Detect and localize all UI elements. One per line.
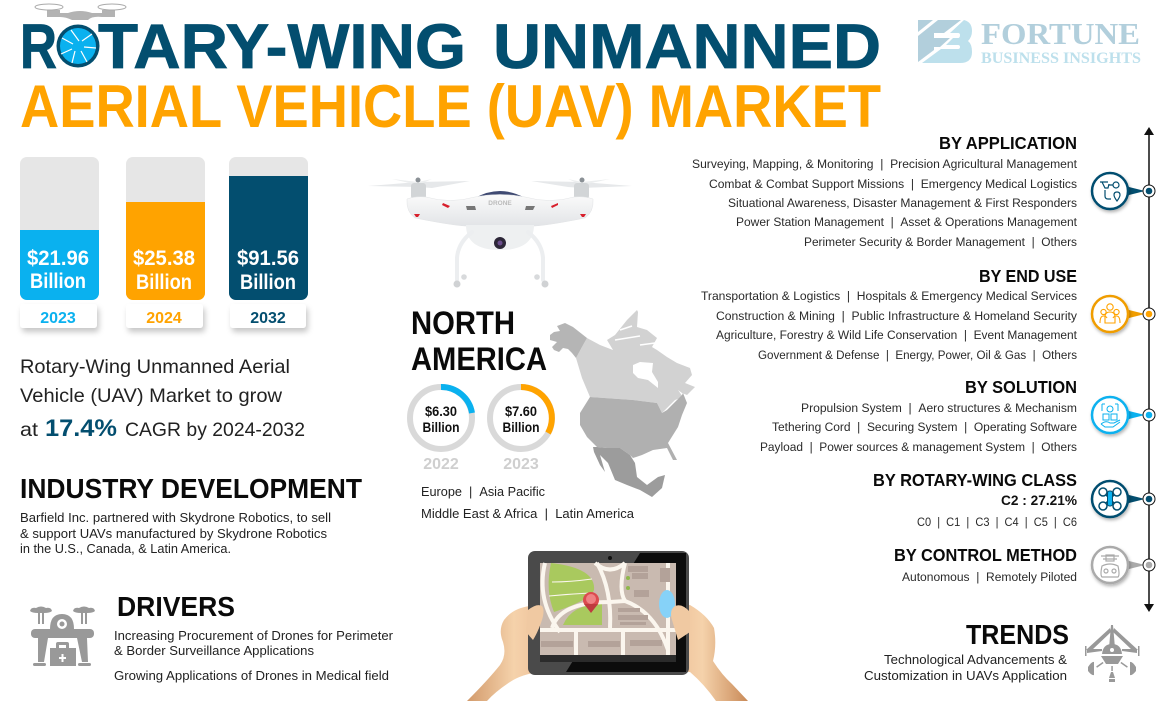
section: by application: Situational Awareness, Disaster Management & First Responders xyxy=(728,196,1077,210)
icon: lens in title xyxy=(56,24,100,68)
map: Canada xyxy=(576,310,695,413)
left arm xyxy=(467,606,545,701)
bar 2023 xyxy=(20,157,99,328)
text block: other regions: Europe | Asia Pacific xyxy=(421,484,545,499)
section: by solution: Propulsion System | Aero structures & Mechanism xyxy=(801,401,1077,415)
section: by solution: Payload | Power sources & management System | Others xyxy=(760,440,1077,454)
bar 2032: $91.56 xyxy=(237,247,299,270)
logo word FORTUNE: FORTUNE xyxy=(981,16,1140,51)
section: by control method: BY CONTROL METHOD xyxy=(894,545,1077,565)
map: Mexico xyxy=(593,447,665,497)
text block: CAGR statement: Vehicle (UAV) Market to grow xyxy=(20,385,283,407)
text block: drivers: Growing Applications of Drones in Medical field xyxy=(114,668,389,683)
text block: CAGR statement: Rotary-Wing Unmanned Aerial xyxy=(20,356,290,378)
text block: trends: Technological Advancements & xyxy=(884,652,1067,667)
section: by solution: BY SOLUTION xyxy=(965,377,1077,397)
heading: drivers: DRIVERS xyxy=(117,591,235,622)
text block: industry development: in the U.S., Canada, & Latin America. xyxy=(20,541,231,556)
section: by solution: Tethering Cord | Securing System | Operating Software xyxy=(772,420,1077,434)
icon: drone above title xyxy=(35,4,126,20)
chart: donut 2022: 2022 xyxy=(423,456,459,473)
bar 2024 xyxy=(126,157,205,328)
title line 2: AERIAL VEHICLE (UAV) MARKET xyxy=(20,73,881,140)
text block: industry development xyxy=(20,510,331,556)
illustration: white drone xyxy=(368,178,632,288)
tablet screen map xyxy=(540,563,676,662)
text block: industry development: Barfield Inc. partnered with Skydrone Robotics, to sell xyxy=(20,510,331,525)
map pin xyxy=(583,592,599,613)
heading: north america: AMERICA xyxy=(411,341,547,377)
icon: end use node xyxy=(1092,296,1155,332)
timeline xyxy=(1144,127,1154,612)
title xyxy=(20,12,881,140)
section: by application: Combat & Combat Support Missions | Emergency Medical Logistics xyxy=(709,177,1077,191)
section: by rotary-wing class xyxy=(873,470,1077,529)
chart: donut 2022: $6.30 xyxy=(425,404,457,419)
icon: solution node xyxy=(1092,397,1155,433)
thumbs xyxy=(526,605,544,640)
text block: drivers xyxy=(114,628,394,683)
map: Alaska xyxy=(550,323,587,358)
bar 2032 xyxy=(229,157,308,328)
text block: industry development: & support UAVs manufactured by Skydrone Robotics xyxy=(20,526,327,541)
text block: other regions: Middle East & Africa | Latin America xyxy=(421,506,635,521)
heading: north america xyxy=(411,305,547,377)
heading: industry development: INDUSTRY DEVELOPMENT xyxy=(20,473,362,504)
section: by application xyxy=(692,133,1078,249)
logo: Fortune Business Insights xyxy=(918,16,1141,67)
chart: donut 2023: Billion xyxy=(502,420,540,435)
title line 1 xyxy=(20,12,881,82)
heading: trends: TRENDS xyxy=(966,619,1069,650)
text block: CAGR statement: CAGR by 2024-2032 xyxy=(125,419,305,441)
text block: CAGR statement: 17.4% xyxy=(45,415,117,442)
text block: trends xyxy=(864,652,1067,683)
section: by end use xyxy=(701,266,1078,362)
bar chart: market size xyxy=(20,157,308,328)
chart: donut 2022: Billion xyxy=(422,420,460,435)
chart: donut 2023 xyxy=(490,387,552,473)
title line 1: R xyxy=(20,12,57,82)
section: by rotary-wing class: C2 : 27.21% xyxy=(1001,493,1077,508)
chart: donut 2023: 2023 xyxy=(503,456,539,473)
tablet body xyxy=(528,551,689,675)
section: by rotary-wing class: BY ROTARY-WING CLASS xyxy=(873,470,1077,490)
bar 2024: Billion xyxy=(136,271,192,294)
section: by control method: Autonomous | Remotely Piloted xyxy=(902,570,1077,584)
bar 2032: Billion xyxy=(240,271,296,294)
section: by end use: Government & Defense | Energy, Power, Oil & Gas | Others xyxy=(758,348,1077,362)
icon: medical drone xyxy=(30,606,95,666)
chart: donut 2022 xyxy=(410,387,472,473)
icon: rotary-wing class node xyxy=(1092,481,1155,517)
text block: drivers: & Border Surveillance Applications xyxy=(114,643,314,658)
section: by end use: Transportation & Logistics | Hospitals & Emergency Medical Services xyxy=(701,289,1077,303)
title line 1: UNMANNED xyxy=(493,12,881,82)
chart: donut 2023: $7.60 xyxy=(505,404,537,419)
section: by solution xyxy=(760,377,1077,454)
section: by application: Power Station Management | Asset & Operations Management xyxy=(736,215,1078,229)
logo subline: BUSINESS INSIGHTS xyxy=(981,50,1141,67)
bar 2024: 2024 xyxy=(146,310,182,327)
section: by application: BY APPLICATION xyxy=(939,133,1077,153)
icon: trends drone xyxy=(1085,625,1140,682)
text block: CAGR statement: at xyxy=(20,419,39,441)
section: by application: Perimeter Security & Border Management | Others xyxy=(804,235,1077,249)
map: Hudson Bay xyxy=(633,362,658,388)
text block: CAGR statement xyxy=(20,356,305,442)
section: by end use: Agriculture, Forestry & Wild Life Conservation | Event Management xyxy=(716,328,1078,342)
bar 2023: 2023 xyxy=(40,310,76,327)
title line 1: TARY-WING xyxy=(98,12,466,82)
section: by application: Surveying, Mapping, & Monitoring | Precision Agricultural Management xyxy=(692,157,1078,171)
map: north america xyxy=(550,310,695,497)
illustration: hands holding tablet xyxy=(467,551,748,701)
section: by end use: Construction & Mining | Public Infrastructure & Homeland Security xyxy=(716,309,1078,323)
bar 2023: Billion xyxy=(30,270,86,293)
bar 2024: $25.38 xyxy=(133,247,195,270)
bar 2032: 2032 xyxy=(250,310,286,327)
illustration: white drone: DRONE xyxy=(488,200,512,207)
section: by control method xyxy=(894,545,1077,584)
title line 1: O xyxy=(60,21,96,77)
text block: drivers: Increasing Procurement of Drones for Perimeter xyxy=(114,628,394,643)
map: United States xyxy=(580,393,687,460)
text block: trends: Customization in UAVs Application xyxy=(864,668,1067,683)
icon: application node xyxy=(1092,173,1155,209)
section: by end use: BY END USE xyxy=(979,266,1077,286)
text block: other regions xyxy=(421,484,635,521)
heading: north america: NORTH xyxy=(411,305,515,341)
icon: control method node xyxy=(1092,547,1155,583)
bar 2023: $21.96 xyxy=(27,247,89,270)
section: by rotary-wing class: C0 | C1 | C3 | C4 | C5 | C6 xyxy=(917,515,1077,529)
right arm xyxy=(672,605,748,701)
